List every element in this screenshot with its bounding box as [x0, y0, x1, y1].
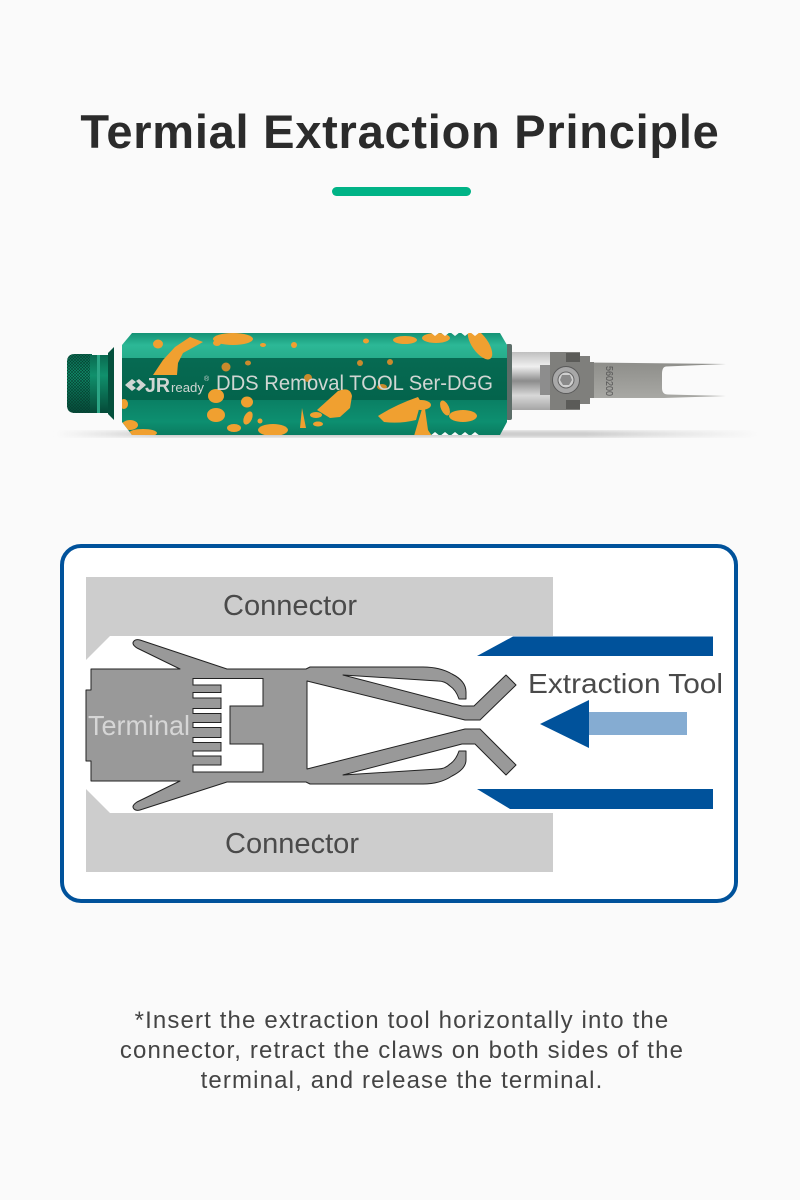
clamp head with screw: [550, 352, 594, 410]
footnote: terminal, and release the terminal.: [201, 1067, 603, 1094]
panel frame: [62, 546, 736, 901]
steel collar: [506, 344, 550, 420]
terminal comb slot: [193, 678, 263, 772]
footnote: [120, 1007, 684, 1094]
extraction tool upper jaw: [477, 636, 713, 656]
connector top: [86, 577, 553, 660]
direction arrow: [540, 700, 687, 748]
blade fork: [588, 362, 726, 398]
ground shadow: [55, 431, 760, 437]
logo and engraved product name: JR: [145, 375, 171, 397]
connector top: Connector: [223, 590, 357, 622]
connector bottom: Connector: [225, 828, 359, 860]
green splatter handle: [122, 333, 507, 435]
logo and engraved product name: ®: [204, 375, 210, 383]
product photo: extraction tool: [67, 333, 725, 438]
paint splatter: [122, 333, 492, 435]
connector bottom: [86, 789, 553, 872]
blade fork: 560200: [603, 366, 614, 396]
footnote: *Insert the extraction tool horizontally into the: [135, 1007, 669, 1034]
accent bar: [332, 187, 471, 196]
terminal label: Terminal: [88, 710, 190, 741]
knurled knob and neck: [67, 347, 114, 420]
extraction tool lower jaw: [477, 789, 713, 809]
terminal: [86, 640, 516, 810]
footnote: connector, retract the claws on both sides of the: [120, 1037, 684, 1064]
extraction tool label: Extraction Tool: [528, 668, 723, 699]
principle diagram panel: [60, 544, 738, 903]
logo and engraved product name: ready: [171, 380, 204, 395]
logo and engraved product name: DDS Removal TOOL Ser-DGG: [216, 372, 493, 395]
logo and engraved product name: [125, 372, 493, 397]
title: Termial Extraction Principle: [80, 105, 720, 158]
